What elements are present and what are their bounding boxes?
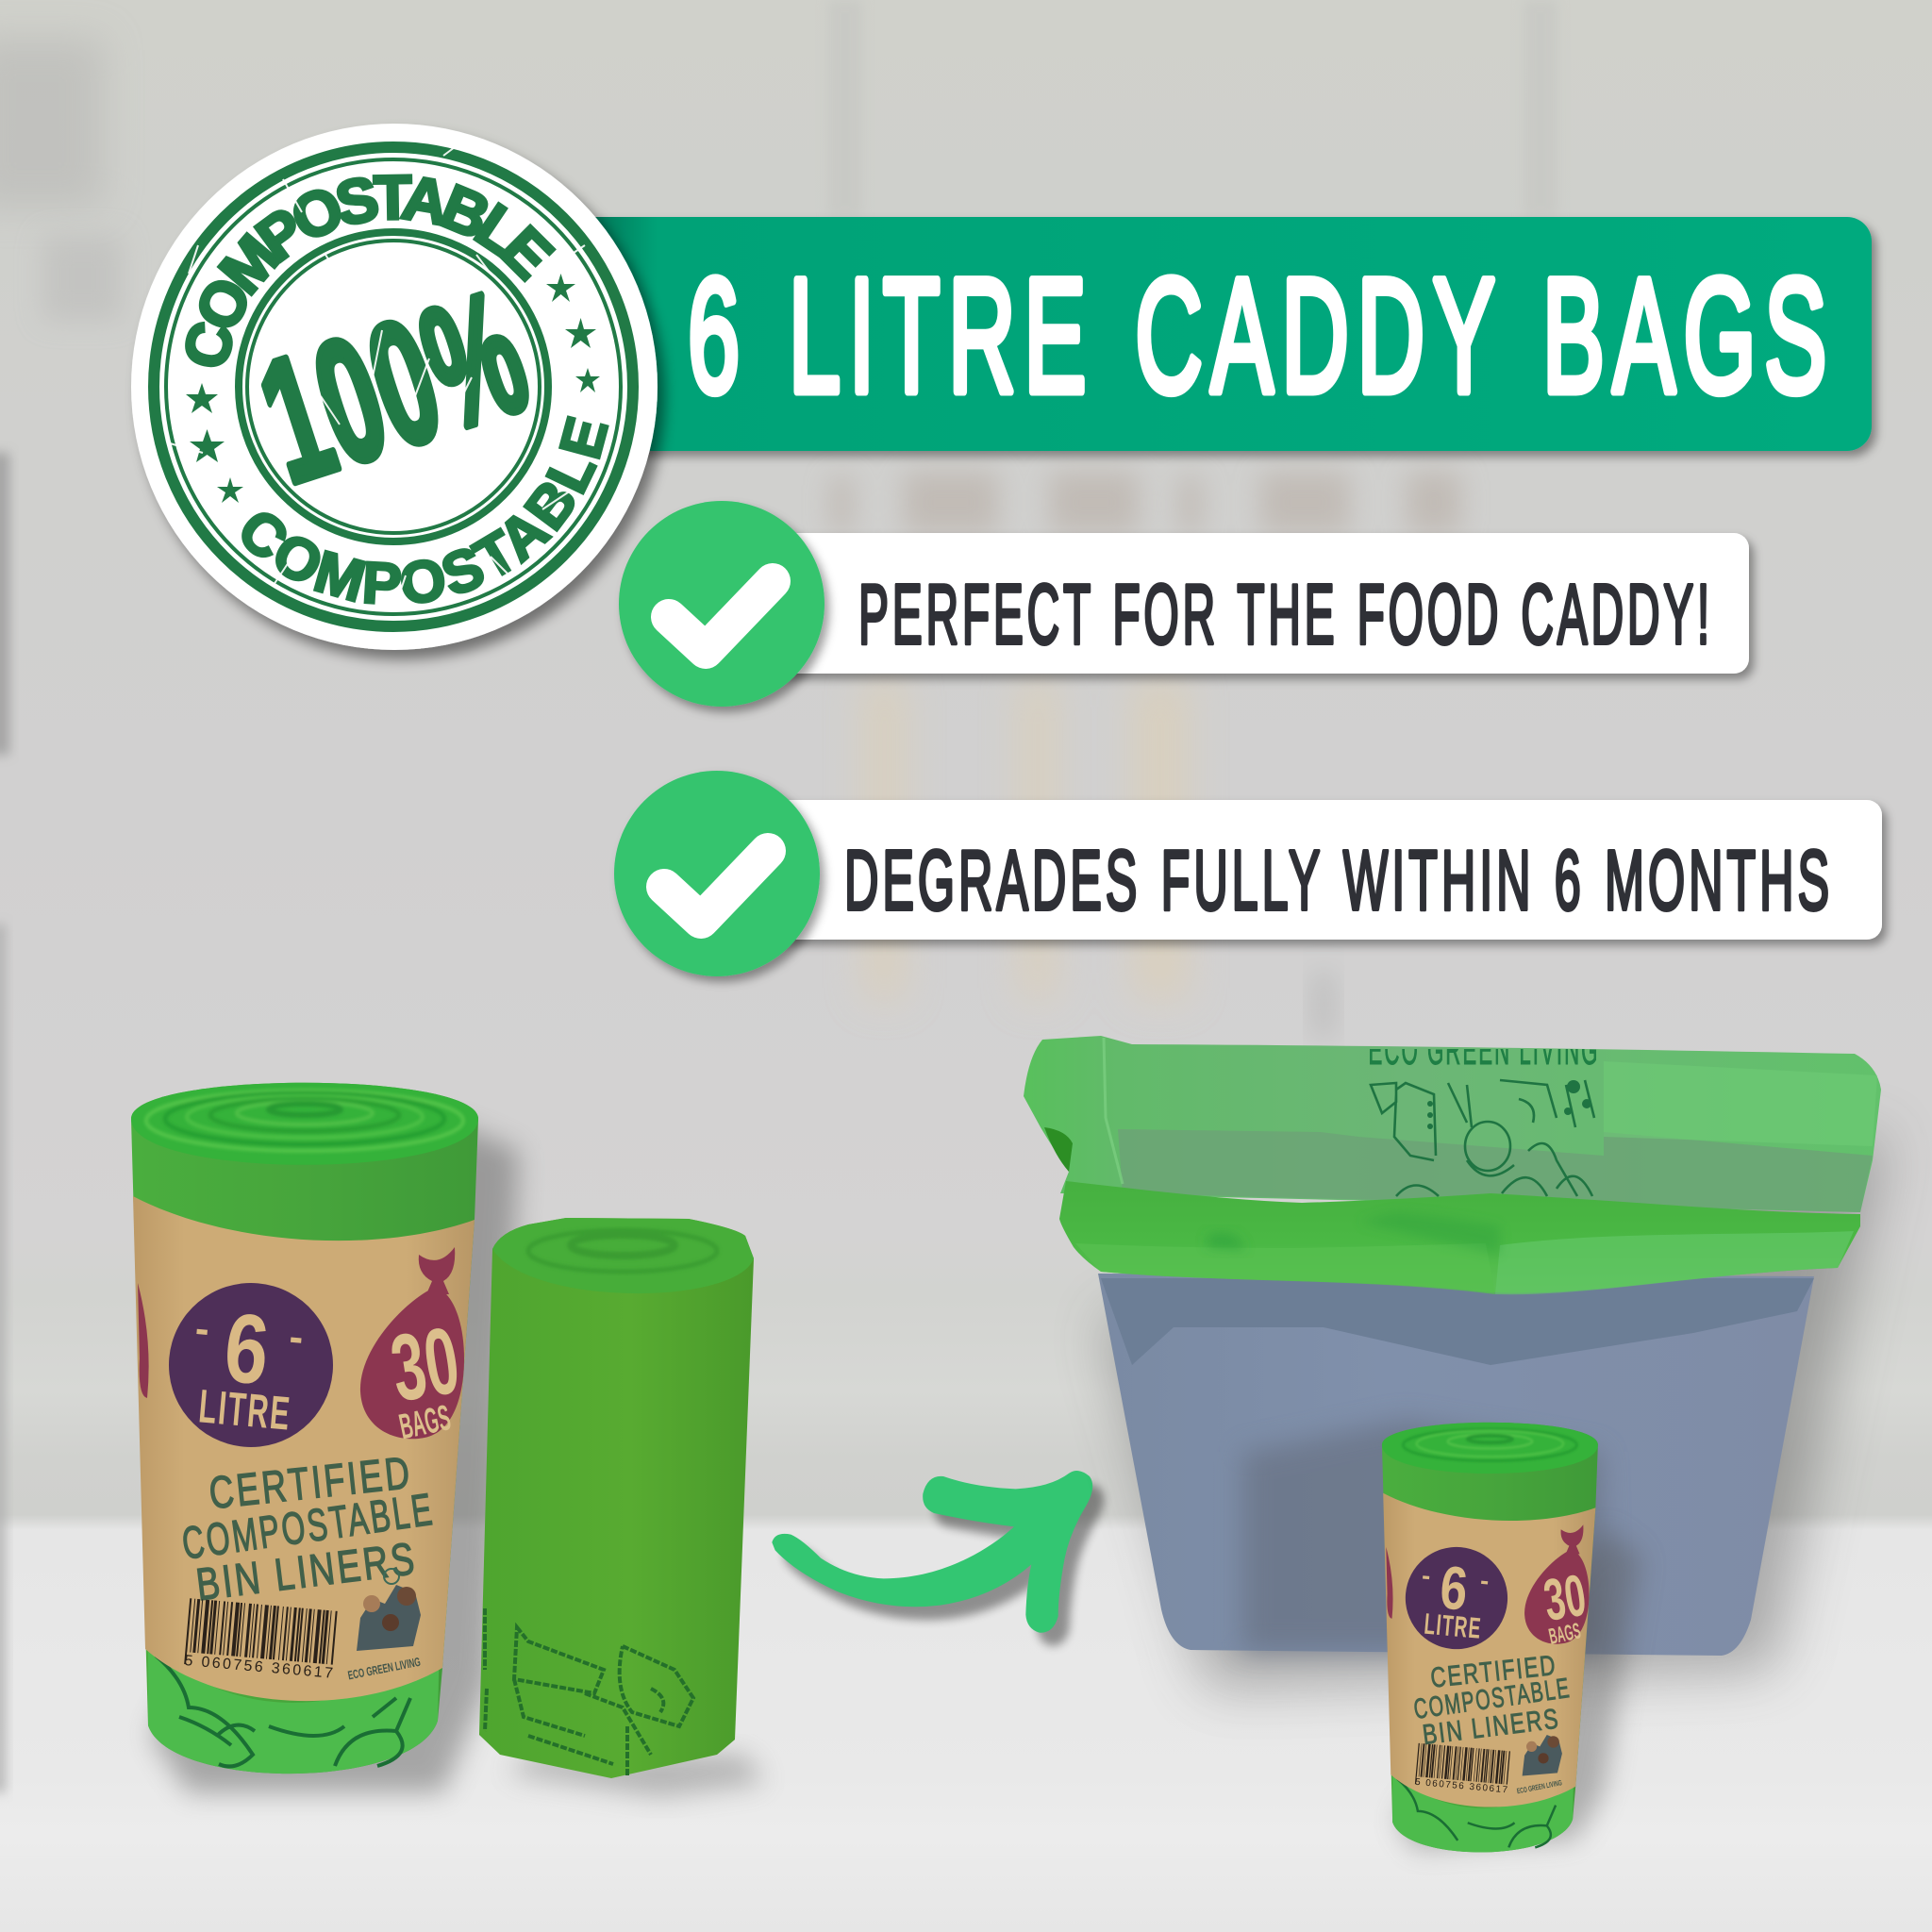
six litre badge: - (1479, 1565, 1491, 1595)
icon: check circle (619, 501, 824, 707)
stamp rings (154, 147, 633, 626)
liner print (1369, 1049, 1596, 1197)
title banner (566, 217, 1872, 451)
brand logo (1516, 1735, 1562, 1795)
bin body (1098, 1274, 1814, 1656)
thirty bags badge: 30 (384, 1307, 466, 1422)
thirty bags badge (360, 1247, 466, 1447)
roll top face (131, 1083, 478, 1165)
liner cuff (1059, 1181, 1860, 1294)
clipped brand text: ECO GREEN LIVING (1368, 1027, 1600, 1074)
brand logo: ECO GREEN LIVING (1516, 1778, 1562, 1795)
pill (755, 800, 1882, 940)
label text: BIN LINERS (1421, 1703, 1561, 1751)
barcode (184, 1631, 336, 1682)
arrow: roll to caddy (772, 1471, 1104, 1646)
barcode (1415, 1764, 1509, 1795)
thirty bags badge (1524, 1524, 1591, 1650)
roll body (1382, 1423, 1598, 1852)
kraft label (133, 1196, 475, 1701)
stamp bottom word: COMPOSTABLE (242, 415, 609, 605)
product: small labelled roll (1382, 1423, 1641, 1852)
six litre badge: - (1421, 1560, 1432, 1591)
product: large labelled roll (131, 1083, 519, 1792)
barcode: 5 060756 360617 (1415, 1777, 1508, 1795)
label text: COMPOSTABLE (1412, 1673, 1573, 1725)
six litre badge (162, 1276, 340, 1454)
barcode: 5 060756 360617 (184, 1653, 334, 1682)
stamp badge: 100% compostable (130, 124, 673, 668)
liner upper (1024, 1036, 1881, 1212)
thirty bags badge: BAGS (396, 1398, 454, 1447)
stamp 100 percent: 100% (240, 254, 547, 521)
brand logo (346, 1569, 422, 1682)
thirty bags badge: BAGS (1547, 1619, 1583, 1650)
six litre badge (1401, 1542, 1512, 1654)
print on bag (156, 1656, 410, 1766)
print on bag (1397, 1779, 1556, 1847)
caddy bin with liner (1024, 1027, 1887, 1689)
blurred shelf items (830, 472, 1461, 533)
roll top (492, 1218, 754, 1293)
side bag graphic (1386, 1547, 1393, 1619)
six litre badge: - (193, 1306, 211, 1353)
label text (179, 1448, 438, 1610)
six litre badge: 6 (1438, 1552, 1471, 1624)
side bag graphic (138, 1283, 149, 1398)
roll body (479, 1218, 754, 1778)
label text: CERTIFIED (1429, 1650, 1558, 1694)
roll body (131, 1083, 478, 1774)
stamp stars (186, 274, 600, 503)
brand logo: ECO GREEN LIVING (346, 1655, 422, 1682)
product: plain green roll (479, 1218, 764, 1797)
kraft label (1383, 1493, 1595, 1807)
feature row: degrades (614, 771, 1882, 976)
thirty bags badge: 30 (1540, 1563, 1591, 1634)
pill (755, 533, 1749, 674)
label text (1412, 1650, 1573, 1751)
label text: CERTIFIED (207, 1448, 415, 1519)
feature row: food caddy (619, 501, 1749, 707)
stamp scratches (170, 142, 613, 604)
six litre badge: 6 (220, 1293, 273, 1406)
six litre badge: - (288, 1314, 306, 1361)
six litre badge: LITRE (197, 1379, 293, 1441)
roll top face (1382, 1423, 1598, 1474)
label text: COMPOSTABLE (179, 1485, 438, 1570)
label text: BIN LINERS (193, 1534, 420, 1610)
six litre badge: LITRE (1423, 1607, 1483, 1645)
stamp top word: COMPOSTABLE (185, 174, 557, 368)
print on roll (485, 1608, 693, 1775)
icon: check circle (614, 771, 820, 976)
